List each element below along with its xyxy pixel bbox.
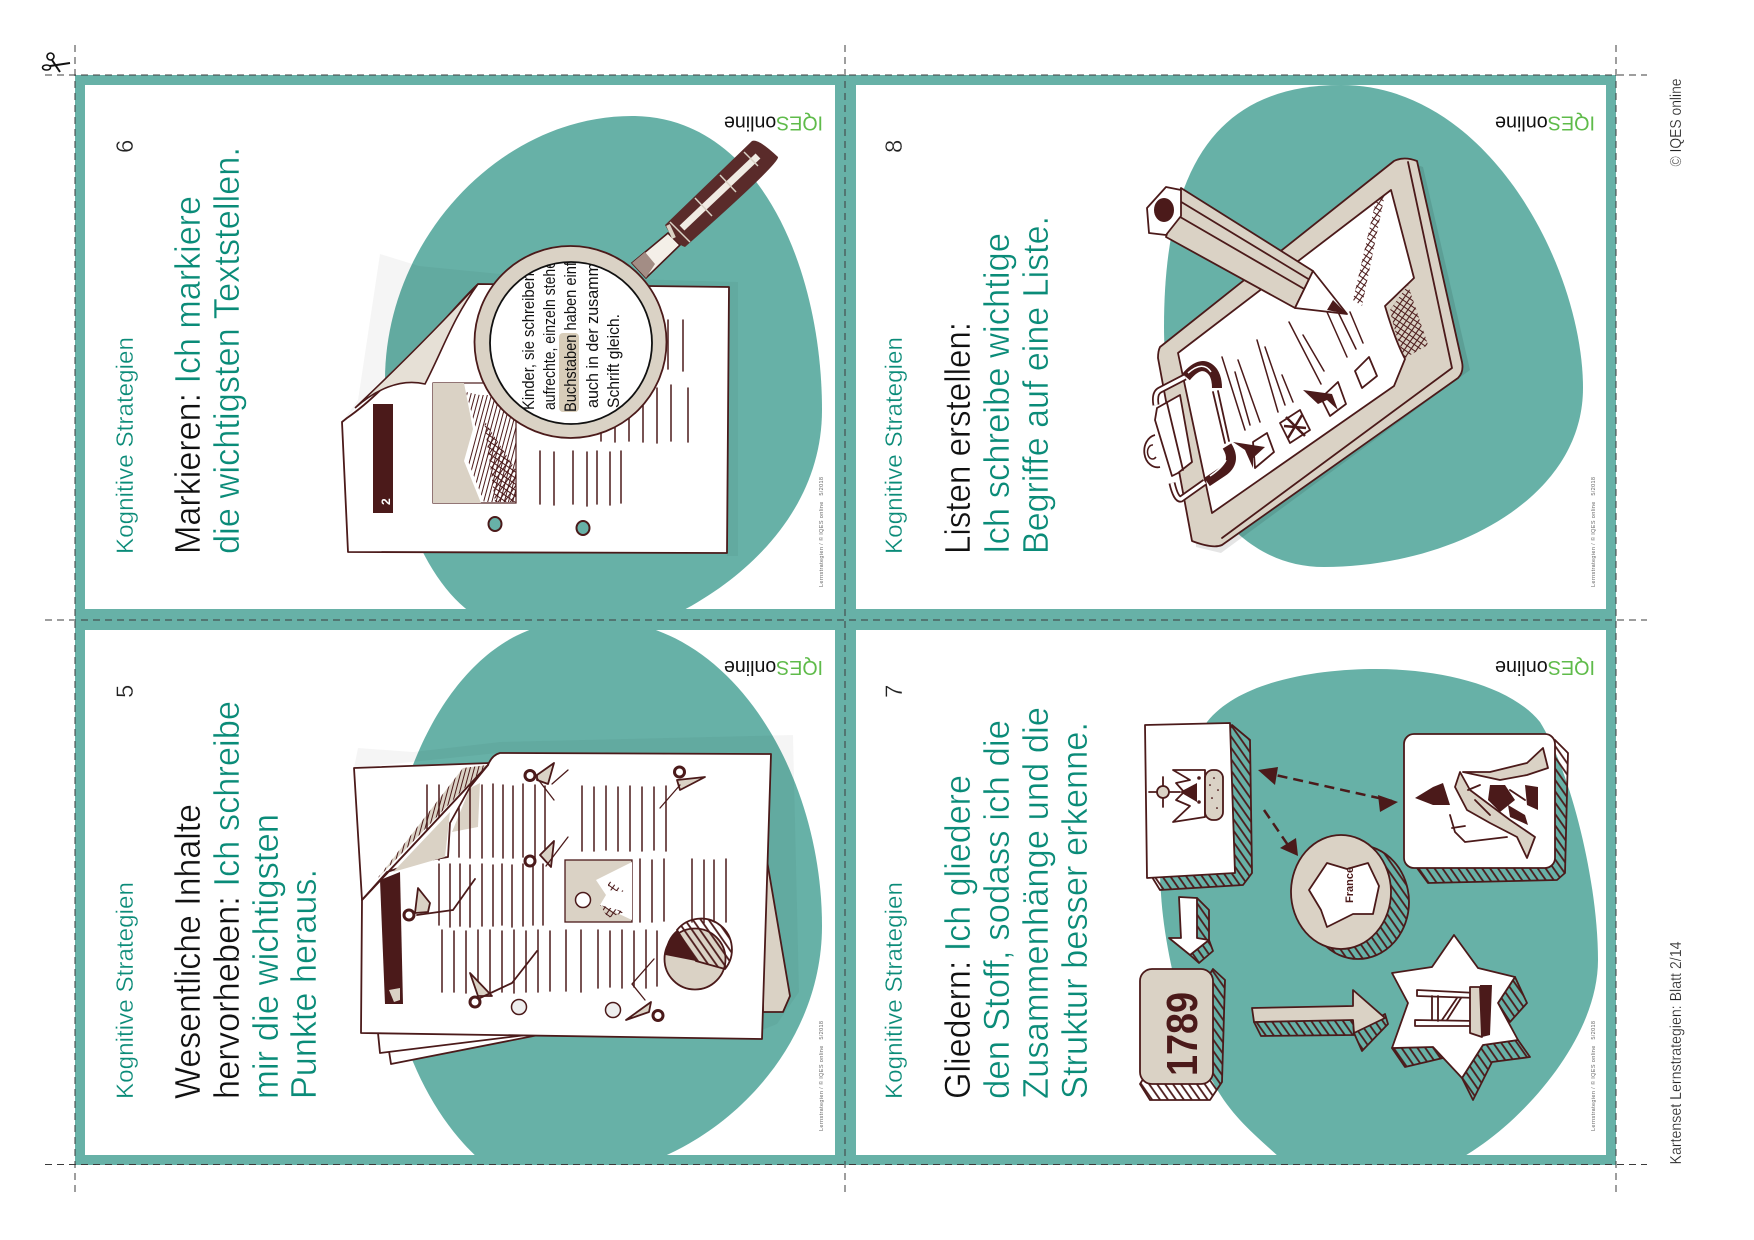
clip — [1144, 366, 1231, 499]
card 7 heading — [937, 707, 1095, 1099]
magnifier handle — [632, 141, 778, 278]
magnifier lens: auch in der zusamm — [583, 263, 602, 408]
France map disc: France — [1344, 867, 1356, 903]
illustration: clipboard with pencil — [1144, 158, 1470, 553]
card 7 heading: Gliedern: Ich gliedere — [937, 775, 978, 1099]
card 6 category label: Kognitive Strategien — [112, 337, 139, 554]
card 7 heading: den Stoff, sodass ich die — [976, 720, 1017, 1099]
panel: card 7 Gliedern — [856, 630, 1606, 1158]
card 5 logo: IQESonline — [724, 656, 823, 678]
panel: card 6 Markieren — [85, 85, 835, 612]
teal card frame background — [75, 75, 1616, 1165]
1789 block — [1140, 969, 1225, 1100]
card 6 logo: IQESonline — [724, 112, 823, 134]
card 7 footer note: Lernstrategien / © IQES online 5/2018 — [1590, 1021, 1597, 1131]
pencil — [1147, 187, 1347, 314]
card 6 teal blob — [385, 116, 822, 612]
illustration: highlighted document stack — [354, 735, 799, 1064]
card 6 heading — [167, 147, 247, 554]
panel: card 8 Listen erstellen — [856, 85, 1606, 609]
card 8 teal blob — [1164, 85, 1583, 567]
card 5 heading: Punkte heraus. — [283, 869, 324, 1099]
card 8 heading: Listen erstellen: — [937, 322, 978, 554]
magnifier lens: Kinder, sie schreiben — [519, 273, 538, 410]
card 7 number: 7 — [881, 685, 908, 698]
dashed arrows — [1258, 767, 1398, 856]
card 6 white area — [85, 85, 835, 609]
magnifier lens: aufrechte, einzeln stehe — [540, 261, 559, 410]
card 7 logo: IQESonline — [1495, 656, 1595, 678]
sheet note: Kartenset Lernstrategien: Blatt 2/14 — [1668, 941, 1685, 1164]
card 7 white area — [856, 630, 1606, 1155]
page curl — [362, 765, 488, 900]
magnifier lens: Buchstaben haben einf — [561, 262, 580, 412]
France map disc — [1291, 835, 1409, 959]
card 8 number: 8 — [881, 140, 908, 153]
magnifier lens: Schrift gleich. — [604, 314, 623, 408]
checkboxes — [1233, 357, 1377, 468]
1789 block: 1789 — [1158, 992, 1207, 1076]
card 7 category label: Kognitive Strategien — [881, 882, 908, 1099]
card 8 heading: Begriffe auf eine Liste. — [1015, 216, 1056, 554]
illustration: document with magnifier — [342, 141, 778, 556]
card 8 footer note: Lernstrategien / © IQES online 5/2018 — [1590, 477, 1597, 587]
card 5 teal blob — [385, 626, 822, 1158]
card 8 heading: Ich schreibe wichtige — [976, 233, 1017, 554]
pie chart — [664, 919, 732, 990]
card 7 heading: Struktur besser erkenne. — [1054, 722, 1095, 1099]
card 5 heading: mir die wichtigsten — [245, 814, 286, 1099]
card 6 number: 6 — [112, 140, 139, 153]
card 6 heading: Markieren: Ich markiere — [167, 196, 208, 554]
card 5 heading — [167, 701, 324, 1099]
magnifier lens — [474, 246, 666, 438]
illustration: structure diagram — [1140, 723, 1568, 1100]
portrait block — [1404, 734, 1568, 883]
arrow right — [1252, 990, 1388, 1051]
card 8 white area — [856, 85, 1606, 609]
card 6 heading: die wichtigsten Textstellen. — [206, 147, 247, 554]
star with guillotine — [1392, 935, 1530, 1100]
panel: card 5 Wesentliche Inhalte hervorheben — [85, 626, 835, 1158]
card 5 number: 5 — [112, 685, 139, 698]
card 8 category label: Kognitive Strategien — [881, 337, 908, 554]
card 6 footer note: Lernstrategien / © IQES online 5/2018 — [818, 477, 825, 587]
card 5 footer note: Lernstrategien / © IQES online 5/2018 — [818, 1021, 825, 1131]
black side bar — [380, 872, 403, 1004]
copyright note: © IQES online — [1668, 78, 1685, 166]
card 7 heading: Zusammenhänge und die — [1015, 707, 1056, 1099]
arrow down — [1169, 897, 1213, 963]
card 8 heading — [937, 216, 1056, 554]
flags — [404, 763, 705, 1020]
illustration: document with magnifier: 2 — [379, 498, 393, 505]
card 5 category label: Kognitive Strategien — [112, 882, 139, 1099]
icon: scissors — [42, 53, 70, 72]
card 8 logo: IQESonline — [1495, 112, 1595, 134]
card 7 teal blob — [1160, 669, 1598, 1158]
card 5 heading: hervorheben: Ich schreibe — [206, 701, 247, 1099]
card 5 white area — [85, 630, 835, 1155]
card 5 heading: Wesentliche Inhalte — [167, 804, 208, 1099]
crown block — [1145, 723, 1252, 890]
